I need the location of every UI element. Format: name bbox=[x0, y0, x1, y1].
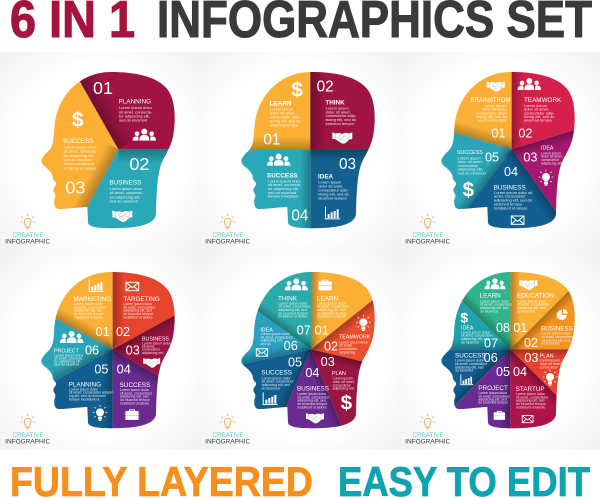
segment 04 success: SUCCESS bbox=[120, 382, 150, 389]
segment 01 marketing: do eiusmod tempor bbox=[74, 312, 105, 316]
segment 07 idea: Lorem ipsum dolor bbox=[461, 330, 491, 334]
segment 01 learn: consectetur adip- bbox=[270, 115, 301, 120]
segment 02 think: consectetur adip- bbox=[326, 113, 357, 118]
creative infographic logo: CREATIVE bbox=[212, 432, 244, 439]
segment 06 success: 06 bbox=[484, 351, 498, 365]
segment 02 think: 02 bbox=[317, 79, 334, 96]
segment 01 learn bbox=[263, 79, 303, 149]
segment 06 success: sit amet, consectetur bbox=[455, 362, 488, 366]
segment 02 targeting: 02 bbox=[116, 325, 130, 339]
segment 03 success: sed do eiusmod bbox=[64, 157, 92, 162]
segment 06 success: Lorem ipsum dolor bbox=[455, 359, 485, 363]
segment 03 plan: $ bbox=[341, 392, 353, 415]
panel: five-part head bbox=[406, 72, 575, 244]
segment 03 business: 03 bbox=[126, 344, 140, 358]
creative infographic logo: INFOGRAPHIC bbox=[5, 239, 50, 246]
segment 02 targeting: sit amet, consectetur bbox=[123, 305, 156, 309]
segment 03 idea: IDEA bbox=[318, 174, 334, 181]
segment 05 success: adipiscing elit, sed bbox=[262, 383, 290, 387]
segment 05 project: adipiscing elit, sed bbox=[478, 398, 507, 402]
segment 05 success: sit amet, consectetur bbox=[262, 380, 295, 384]
segment 03 idea: consectetur adip- bbox=[318, 187, 350, 192]
segment 04 business: amet, consectetur bbox=[494, 194, 526, 199]
segment 05 project bbox=[478, 365, 511, 420]
segment 01 education: adipiscing elit, sed bbox=[517, 306, 546, 310]
segment 01 learn: eiusmod tempor bbox=[270, 122, 299, 127]
segment 08 learn: LEARN bbox=[480, 293, 501, 300]
segment 08 learn: sit amet, consectetur bbox=[480, 303, 513, 307]
segment 03 success bbox=[63, 109, 98, 197]
head segments bbox=[441, 272, 575, 428]
segment 04 business: Lorem ipsum dolor sit bbox=[494, 190, 533, 195]
segment 02 business: adipiscing elit, sed bbox=[541, 338, 570, 342]
segment 01 brainstorm: iscing elit, sed do bbox=[476, 114, 507, 119]
segment 03 success: $ bbox=[72, 109, 84, 132]
segment 02 teamwork bbox=[518, 78, 562, 141]
segment 02 business bbox=[524, 309, 574, 350]
segment 04 success: Lorem ipsum dolor bbox=[268, 178, 302, 183]
segment 03 idea: eiusmod tempor bbox=[318, 195, 348, 200]
creative infographic logo bbox=[205, 414, 250, 446]
segment 02 teamwork: sit amet, bbox=[339, 344, 353, 348]
panel: eight-part head bbox=[406, 272, 575, 444]
segment 02 targeting: incididunt ut labore bbox=[123, 315, 153, 319]
segment 04 startup: STARTUP bbox=[516, 386, 545, 393]
segment 03 plan: PLAN bbox=[540, 354, 554, 360]
segment 02 business: 02 bbox=[524, 336, 538, 350]
segment 05 success: 05 bbox=[288, 355, 302, 369]
head segments bbox=[241, 272, 375, 428]
segment 01 education: 01 bbox=[513, 321, 527, 335]
segment 03 idea: 03 bbox=[523, 151, 537, 165]
segment 07 think: 07 bbox=[297, 323, 311, 337]
creative infographic logo bbox=[405, 214, 450, 246]
head segments bbox=[41, 72, 175, 228]
segment 02 targeting: do eiusmod tempor bbox=[123, 312, 154, 316]
creative infographic logo: CREATIVE bbox=[12, 232, 44, 239]
head segments bbox=[241, 72, 375, 228]
segment 04 success: adipiscing elit, sed bbox=[120, 395, 149, 399]
segment 02 think: eiusmod tempor bbox=[326, 121, 355, 126]
segment 07 think: THINK bbox=[278, 295, 298, 302]
segment 01 education: sit amet, consectetur bbox=[517, 303, 550, 307]
panel: four-part head bbox=[206, 72, 375, 244]
segment 01 planning bbox=[93, 78, 156, 141]
segment 04 success: sed do eiusmod bbox=[268, 190, 296, 195]
segment 06 idea: sed do bbox=[261, 342, 271, 346]
segment 02 think: dolor sit amet, bbox=[326, 109, 351, 114]
segment 07 think: sit amet, consectetur bbox=[278, 305, 311, 309]
segment 02 think bbox=[317, 79, 357, 144]
segment 04 success: 04 bbox=[117, 362, 131, 376]
segment 07 think: adipiscing elit, sed bbox=[278, 308, 307, 312]
creative infographic logo: INFOGRAPHIC bbox=[205, 239, 250, 246]
segment 04 startup: incididunt ut labore bbox=[516, 405, 545, 409]
segment 01 planning: sed do eiusmod bbox=[119, 118, 147, 123]
segment 01 brainstorm: 01 bbox=[491, 127, 505, 141]
segment 03 business: Lorem ipsum dolor bbox=[142, 342, 172, 346]
segment 04 business: do eiusmod tempor bbox=[297, 402, 328, 406]
segment 06 idea bbox=[256, 328, 298, 356]
segment 06 idea: Lorem ipsum dolor bbox=[261, 332, 290, 336]
segment 04 success: tempor incididunt bbox=[268, 194, 299, 199]
segment 04 success: sit amet, consecte- bbox=[268, 182, 302, 187]
segment 04 startup: sit amet, consectetur bbox=[516, 395, 549, 399]
segment 01 learn: Lorem ipsum bbox=[270, 106, 294, 111]
segment 04 business: BUSINESS bbox=[494, 184, 526, 191]
panel: three-part head bbox=[6, 72, 175, 244]
segment 05 success: consectetur bbox=[458, 163, 479, 168]
segment 01 learn: Lorem ipsum dolor bbox=[317, 301, 347, 305]
segment 07 idea: adipiscing elit, sed bbox=[461, 337, 490, 341]
segment 04 business: incididunt ut labore bbox=[494, 205, 528, 210]
segment 03 plan: 03 bbox=[321, 355, 335, 369]
segment 04 business: 04 bbox=[305, 366, 319, 380]
segment 02 teamwork: Lorem ipsum bbox=[524, 103, 548, 108]
segment 01 learn: $ bbox=[291, 79, 303, 102]
segment 01 learn: LEARN bbox=[317, 295, 339, 302]
segment 02 business: tur adipiscing elit, bbox=[110, 194, 140, 199]
segment 02 teamwork: TEAMWORK bbox=[339, 334, 371, 340]
segment 05 project: Lorem ipsum dolor bbox=[478, 391, 508, 395]
segment 08 learn: adipiscing elit, sed bbox=[480, 306, 509, 310]
segment 05 project: sit amet, consectetur bbox=[478, 394, 511, 398]
segment 03 plan: Lorem ipsum bbox=[540, 359, 560, 363]
segment 02 teamwork: adipiscing bbox=[339, 350, 355, 354]
segment 02 business: BUSINESS bbox=[541, 325, 573, 332]
segment 04 success bbox=[267, 154, 309, 225]
segment 01 marketing: sit amet, consectetur bbox=[74, 305, 107, 309]
segment 01 brainstorm: Lorem ipsum bbox=[484, 103, 507, 108]
segment 03 plan: adipiscing elit, bbox=[333, 386, 355, 390]
segment 02 teamwork: dolor sit amet, bbox=[524, 107, 549, 112]
segment 02 business: do eiusmod bbox=[541, 342, 559, 346]
segment 01 learn: incididunt ut labore bbox=[317, 315, 346, 319]
segment 03 plan: dolor sit amet, bbox=[333, 380, 355, 384]
segment 05 success: 05 bbox=[485, 150, 499, 164]
segment 06 idea: 06 bbox=[284, 339, 298, 353]
segment 01 education bbox=[513, 280, 554, 335]
segment 06 success: do eiusmod bbox=[455, 369, 473, 373]
segment 02 business: Lorem ipsum dolor bbox=[541, 332, 571, 336]
segment 01 learn: 01 bbox=[315, 323, 329, 337]
creative infographic logo: CREATIVE bbox=[212, 232, 244, 239]
segment 06 idea: sit amet, consectetur bbox=[261, 335, 294, 339]
segment 02 think: iscing elit, sed do bbox=[326, 117, 357, 122]
segment 03 success: tempor incididunt bbox=[64, 161, 95, 166]
segment 03 idea bbox=[523, 146, 563, 186]
creative infographic logo: CREATIVE bbox=[412, 232, 444, 239]
panel: six-part head bbox=[6, 272, 175, 444]
segment 01 marketing: 01 bbox=[96, 325, 110, 339]
segment 06 success: adipiscing elit, sed bbox=[455, 365, 484, 369]
segment 08 learn: do eiusmod bbox=[480, 309, 498, 313]
segment 07 idea: IDEA bbox=[461, 325, 474, 331]
segment 07 idea: 07 bbox=[484, 336, 498, 350]
segment 02 business: Lorem ipsum dolor bbox=[110, 186, 143, 191]
segment 06 project: Lorem ipsum dolor bbox=[54, 353, 84, 357]
segment 04 business: adipiscing elit, sed bbox=[297, 399, 326, 403]
segment 01 marketing: adipiscing elit, sed bbox=[74, 309, 103, 313]
segment 03 idea: adipiscing elit bbox=[541, 161, 562, 165]
segment 05 planning bbox=[69, 362, 114, 421]
segment 03 plan: dolor sit amet, bbox=[540, 362, 562, 366]
segment 07 idea: $ bbox=[460, 309, 468, 325]
segment 02 teamwork: iscing elit, sed do bbox=[524, 114, 555, 119]
segment 07 think: incididunt ut labore bbox=[278, 315, 308, 319]
segment 04 business: 04 bbox=[504, 165, 518, 179]
segment 01 brainstorm: dolor sit amet, bbox=[482, 107, 507, 112]
segment 04 success: Lorem ipsum dolor bbox=[120, 388, 150, 392]
segment 07 idea bbox=[460, 309, 498, 350]
segment 02 business: 02 bbox=[129, 154, 149, 174]
segment 05 project: do eiusmod tempor bbox=[478, 401, 509, 405]
segment 04 success: incididunt ut labore bbox=[120, 401, 149, 405]
segment 05 success: sed do eiusmod bbox=[458, 170, 486, 175]
segment 03 idea: IDEA bbox=[541, 146, 554, 152]
segment 04 success: 04 bbox=[291, 208, 309, 225]
segment 04 business: Lorem ipsum dolor bbox=[297, 392, 327, 396]
segment 06 project: PROJECT bbox=[54, 348, 80, 354]
segment 02 think: THINK bbox=[325, 99, 345, 106]
segment 01 planning: sit amet, consecte- bbox=[119, 109, 153, 114]
footer slogans bbox=[10, 458, 590, 498]
segment 07 think bbox=[278, 278, 311, 337]
segment 03 business: adipiscing elit, bbox=[142, 351, 164, 355]
background panel bbox=[0, 52, 600, 450]
segment 02 business bbox=[109, 154, 149, 222]
segment 04 business: incididunt ut labore bbox=[297, 405, 327, 409]
segment 05 success: Lorem ipsum bbox=[458, 155, 481, 160]
creative infographic logo: INFOGRAPHIC bbox=[5, 439, 50, 446]
segment 03 idea: 03 bbox=[339, 156, 356, 173]
segment 06 idea: IDEA bbox=[260, 328, 273, 334]
segment 03 idea: Lorem ipsum bbox=[318, 179, 342, 184]
segment 04 business: sit amet, consectetur bbox=[297, 395, 330, 399]
segment 02 targeting: Lorem ipsum dolor bbox=[123, 302, 153, 306]
segment 03 idea bbox=[318, 156, 356, 219]
segment 05 success: adipiscing elit, bbox=[458, 167, 483, 172]
segment 03 plan: Lorem ipsum bbox=[333, 377, 353, 381]
segment 07 think: do eiusmod tempor bbox=[278, 311, 309, 315]
segment 04 success: SUCCESS bbox=[267, 172, 298, 179]
segment 01 marketing: MARKETING bbox=[74, 296, 111, 303]
segment 04 startup: adipiscing elit, sed bbox=[516, 399, 545, 403]
segment 02 targeting: TARGETING bbox=[123, 296, 160, 303]
segment 03 idea: dolor sit amet, bbox=[541, 155, 563, 159]
segment 02 business: sed do eiusmod bbox=[110, 199, 138, 204]
segment 04 business bbox=[494, 165, 533, 224]
segment 03 plan bbox=[321, 355, 355, 415]
segment 05 success: SUCCESS bbox=[457, 150, 483, 156]
segment 05 success bbox=[261, 355, 302, 405]
creative infographic logo bbox=[405, 414, 450, 446]
segment 01 planning: PLANNING bbox=[119, 98, 151, 105]
segment 02 teamwork: consectetur bbox=[339, 347, 358, 351]
segment 01 learn bbox=[315, 280, 350, 337]
segment 04 startup: Lorem ipsum dolor bbox=[516, 392, 546, 396]
segment 05 planning: tempor incididunt ut bbox=[69, 397, 99, 401]
segment 01 education: EDUCATION bbox=[517, 293, 554, 300]
segment 03 plan: consectetur bbox=[333, 383, 352, 387]
segment 05 planning: ing elit, sed do eiusmod bbox=[69, 394, 106, 398]
segment 04 business bbox=[297, 366, 330, 423]
segment 04 startup bbox=[513, 365, 549, 423]
segment 03 idea: Lorem ipsum bbox=[541, 151, 561, 155]
segment 03 success: tur adipiscing elit, bbox=[64, 153, 94, 158]
segment 06 project: tur adipiscing elit, bbox=[54, 360, 81, 364]
head segments bbox=[441, 72, 575, 228]
segment 03 plan: 03 bbox=[524, 351, 538, 365]
segment 05 success bbox=[457, 150, 499, 201]
segment 06 project bbox=[54, 331, 99, 367]
segment 08 learn: Lorem ipsum dolor bbox=[480, 299, 510, 303]
segment 04 success: tur adipiscing elit, bbox=[268, 186, 299, 191]
segment 05 planning: sit amet, consectetur adipisc- bbox=[69, 391, 114, 395]
segment 01 marketing: incididunt ut labore bbox=[74, 315, 103, 319]
segment 04 startup: do eiusmod tempor bbox=[516, 402, 547, 406]
segment 03 idea: consectetur bbox=[541, 158, 560, 162]
segment 01 learn: dolor sit amet, bbox=[270, 111, 295, 116]
segment 05 project: PROJECT bbox=[478, 385, 508, 392]
segment 05 success: dolor sit amet, bbox=[458, 159, 483, 164]
segment 02 teamwork: 02 bbox=[324, 340, 338, 354]
segment 06 project: sed do eiusmod bbox=[54, 363, 79, 367]
segment 07 think: Lorem ipsum dolor bbox=[278, 301, 308, 305]
segment 01 education: do eiusmod bbox=[517, 309, 535, 313]
segment 08 learn: 08 bbox=[496, 321, 510, 335]
segment 03 success: SUCCESS bbox=[63, 138, 94, 145]
creative infographic logo: CREATIVE bbox=[12, 432, 44, 439]
segment 03 business bbox=[126, 336, 172, 368]
segment 01 marketing: Lorem ipsum dolor bbox=[74, 302, 104, 306]
segment 01 brainstorm: BRAINSTROM bbox=[471, 98, 511, 104]
segment 05 success: SUCCESS bbox=[261, 370, 292, 377]
creative infographic logo bbox=[5, 414, 50, 446]
segment 01 planning: Lorem ipsum dolor bbox=[119, 105, 153, 110]
segment 05 project: 05 bbox=[496, 365, 510, 379]
segment 02 teamwork bbox=[324, 315, 371, 354]
head segments bbox=[41, 272, 175, 428]
segment 04 success bbox=[117, 362, 153, 420]
segment 02 teamwork: Lorem ipsum dolor bbox=[339, 340, 369, 344]
segment 02 targeting: adipiscing elit, sed bbox=[123, 309, 152, 313]
segment 05 planning: 05 bbox=[94, 362, 108, 376]
segment 01 learn: iscing elit, sed do bbox=[270, 119, 301, 124]
segment 01 brainstorm bbox=[471, 81, 511, 141]
segment 03 success: Lorem ipsum dolor bbox=[64, 144, 97, 149]
segment 01 learn: adipiscing elit, sed bbox=[317, 308, 346, 312]
segment 03 idea: dolor sit amet, bbox=[318, 183, 343, 188]
panel: seven-part head bbox=[206, 272, 375, 444]
segment 02 business: BUSINESS bbox=[109, 179, 141, 186]
segment 03 business: consectetur bbox=[142, 348, 161, 352]
segment 01 planning: tur adipiscing elit, bbox=[119, 114, 150, 119]
segment 08 learn bbox=[480, 278, 513, 335]
segment 05 success: Lorem ipsum dolor bbox=[262, 376, 291, 380]
segment 03 success: sit amet, consecte- bbox=[64, 149, 98, 154]
creative infographic logo: INFOGRAPHIC bbox=[405, 239, 450, 246]
segment 02 think: Lorem ipsum bbox=[326, 105, 349, 110]
segment 01 learn: LEARN bbox=[270, 100, 292, 107]
segment 01 learn: do eiusmod tempor bbox=[317, 311, 348, 315]
segment 03 plan bbox=[524, 351, 562, 386]
creative infographic logo bbox=[5, 214, 50, 246]
segment 03 plan: PLAN bbox=[332, 371, 346, 377]
creative infographic logo bbox=[205, 214, 250, 246]
segment 06 project: sit amet, consecte bbox=[54, 356, 82, 360]
segment 03 success: ut labore et dolore bbox=[64, 165, 97, 170]
creative infographic logo: INFOGRAPHIC bbox=[405, 439, 450, 446]
segment 04 business: BUSINESS bbox=[297, 386, 329, 393]
segment 01 brainstorm: eiusmod tempor bbox=[478, 118, 507, 123]
segment 04 success: sit amet, consectetur bbox=[120, 391, 153, 395]
segment 01 marketing bbox=[74, 279, 111, 339]
segment 05 planning: PLANNING bbox=[69, 381, 101, 388]
segment 01 brainstorm: consectetur adip- bbox=[476, 110, 507, 115]
segment 01 education: Lorem ipsum dolor bbox=[517, 299, 547, 303]
segment 04 business: adipiscing elit, sed do bbox=[494, 198, 533, 203]
segment 03 plan: consectetur bbox=[540, 365, 559, 369]
segment 02 teamwork: 02 bbox=[518, 127, 532, 141]
segment 05 planning: Lorem ipsum dolor bbox=[69, 387, 99, 391]
creative infographic logo: INFOGRAPHIC bbox=[205, 439, 250, 446]
segment 03 business: sit amet, bbox=[142, 345, 155, 349]
segment 04 business: eiusmod tempor bbox=[494, 201, 523, 206]
segment 03 success: 03 bbox=[65, 177, 85, 197]
creative infographic logo: CREATIVE bbox=[412, 432, 444, 439]
segment 02 business: sit amet, consectetur bbox=[541, 335, 574, 339]
segment 06 success: SUCCESS bbox=[455, 353, 486, 360]
segment 06 idea: adipiscing elit, bbox=[261, 339, 283, 343]
segment 03 business: BUSINESS bbox=[142, 336, 169, 342]
segment 05 success: do eiusmod bbox=[262, 386, 280, 390]
segment 02 teamwork: TEAMWORK bbox=[524, 97, 562, 104]
segment 04 startup: 04 bbox=[513, 365, 527, 379]
segment 05 success: $ bbox=[463, 178, 475, 201]
segment 06 project: 06 bbox=[85, 344, 99, 358]
segment 03 idea: iscing elit, sed do bbox=[318, 191, 350, 196]
segment 01 planning: 01 bbox=[93, 78, 113, 98]
segment 02 business: sit amet, consecte- bbox=[110, 190, 144, 195]
segment 02 teamwork: eiusmod tempor bbox=[524, 118, 553, 123]
segment 07 idea: sit amet, consectetur bbox=[461, 334, 494, 338]
segment 06 success bbox=[455, 351, 498, 385]
segment 01 learn: sit amet, consectetur bbox=[317, 305, 350, 309]
segment 07 idea: do eiusmod bbox=[461, 340, 479, 344]
segment 04 success: do eiusmod tempor bbox=[120, 398, 151, 402]
segment 02 targeting bbox=[116, 282, 160, 339]
segment 02 teamwork: consectetur adip- bbox=[524, 110, 555, 115]
segment 01 learn: 01 bbox=[263, 132, 280, 149]
